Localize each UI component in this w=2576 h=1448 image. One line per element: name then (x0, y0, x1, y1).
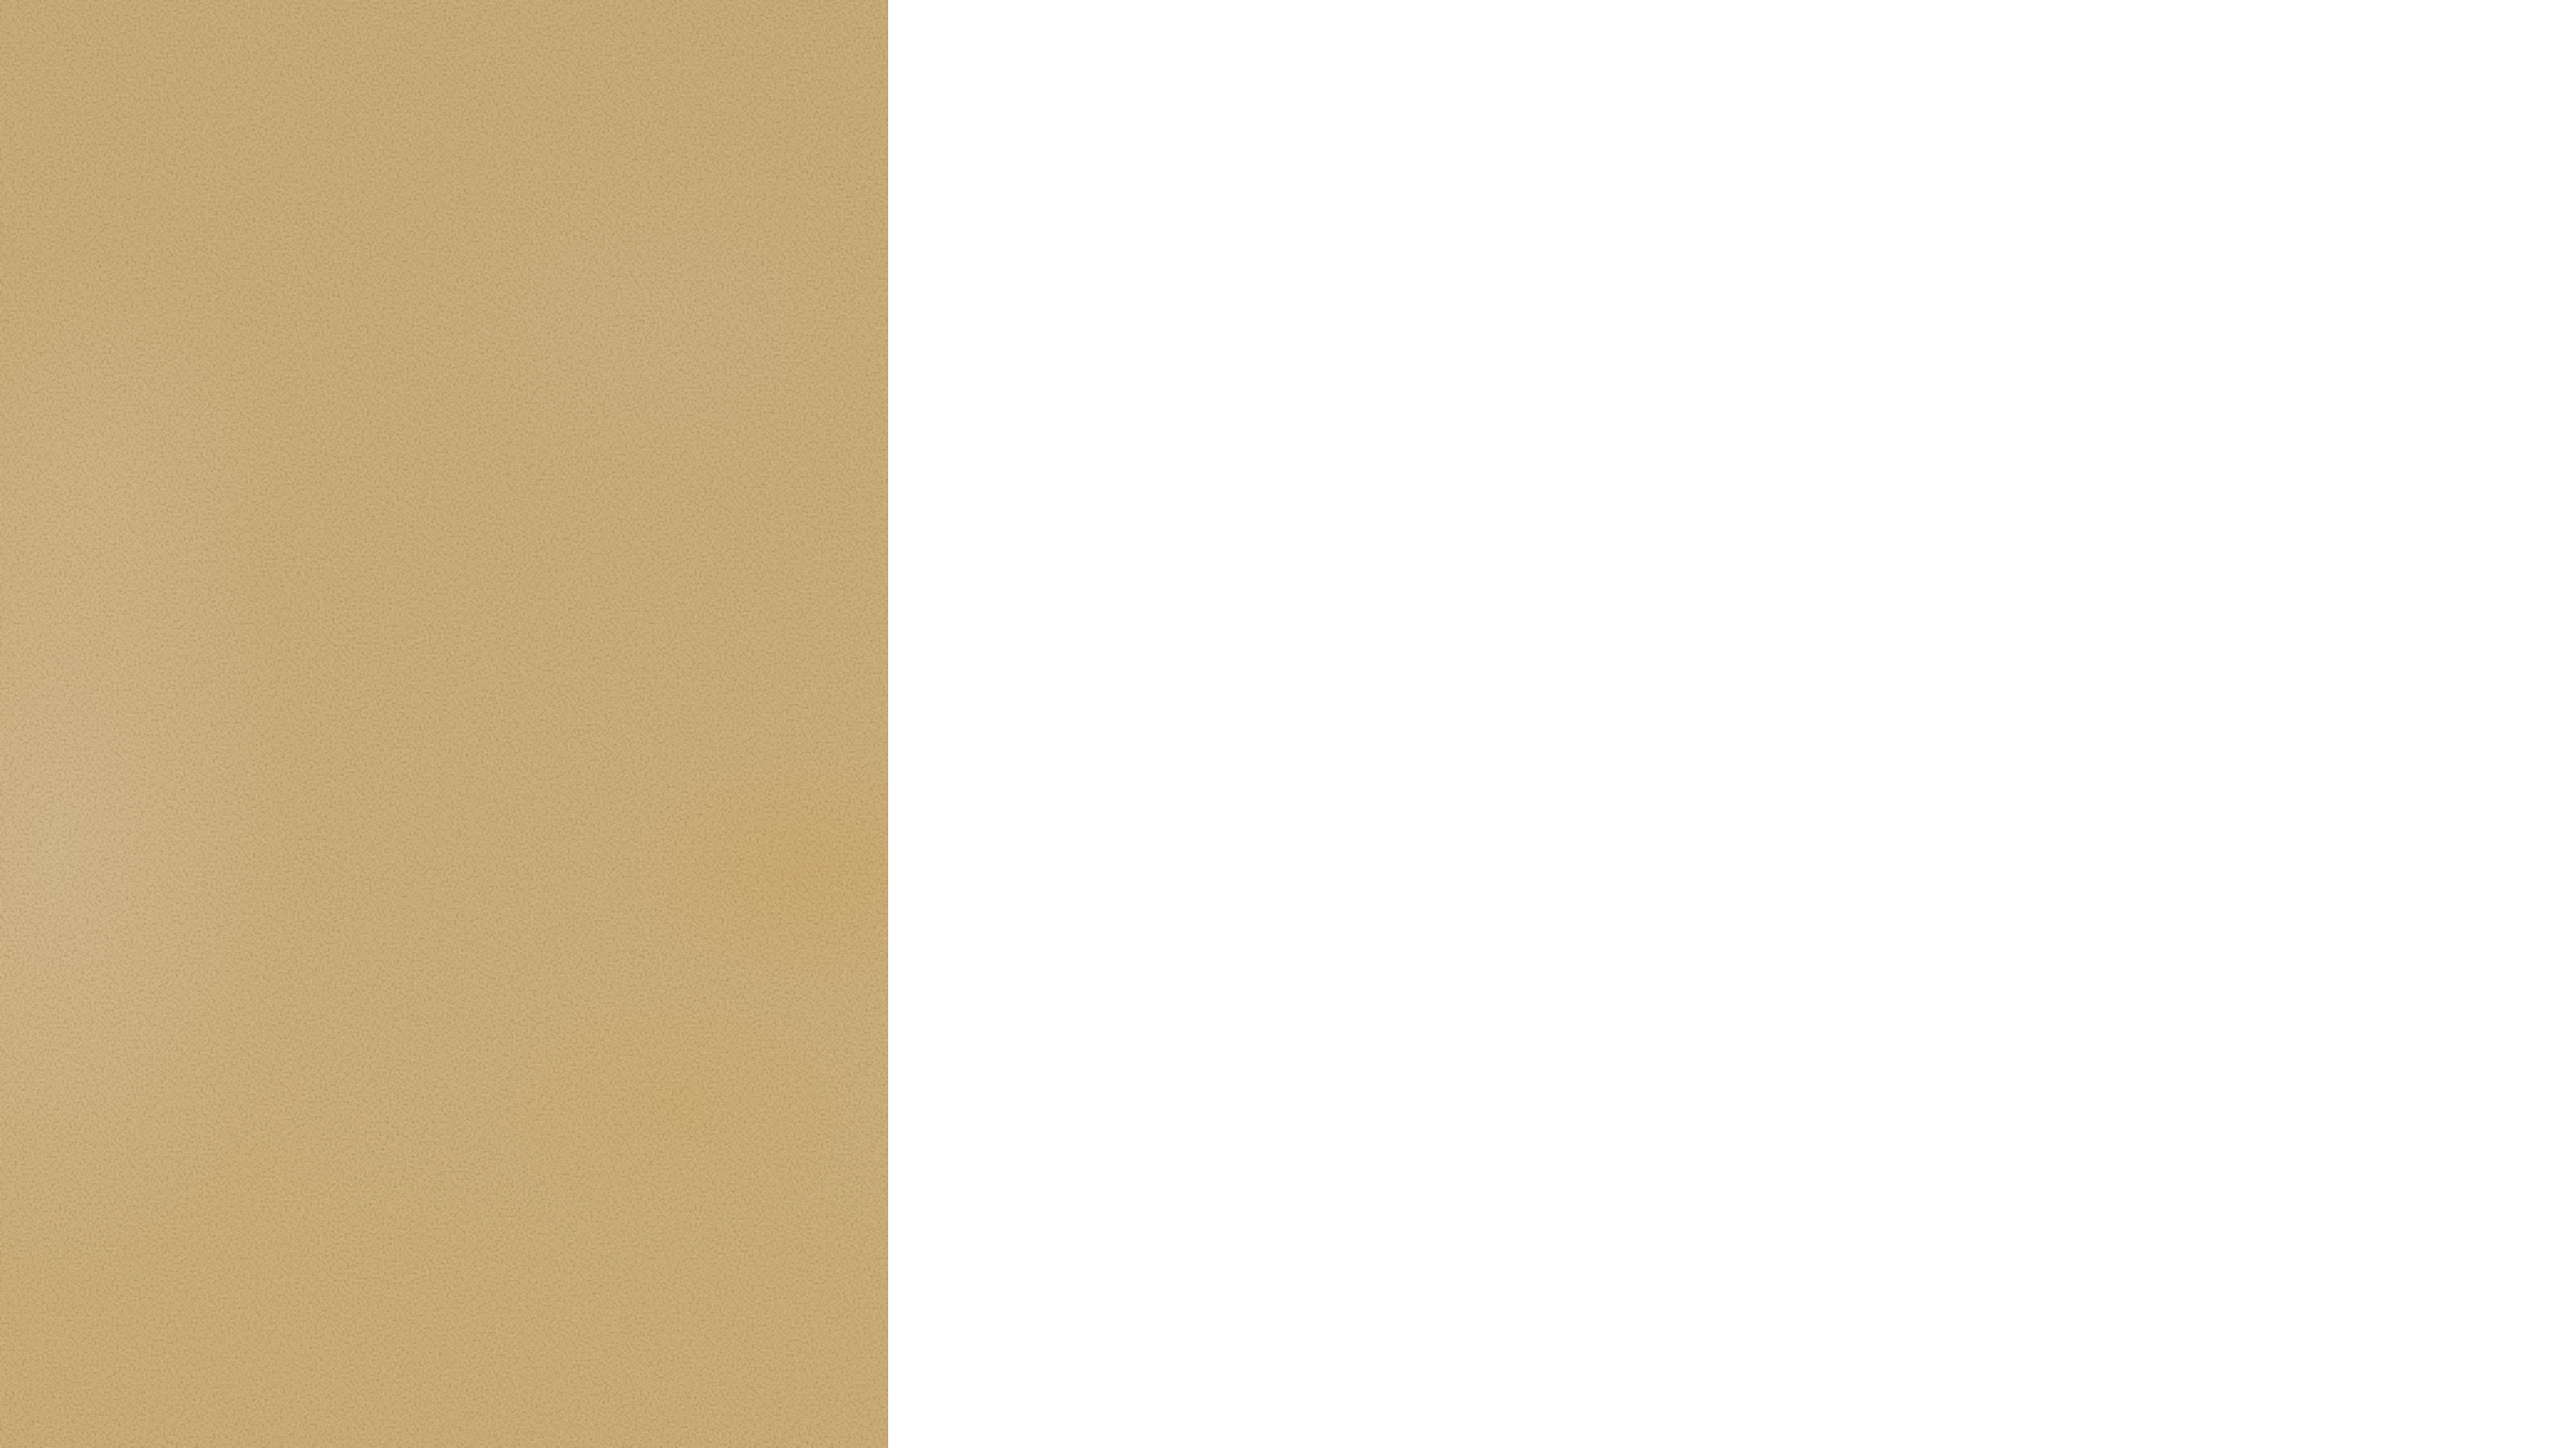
panel: tan textured block (0, 0, 888, 1448)
